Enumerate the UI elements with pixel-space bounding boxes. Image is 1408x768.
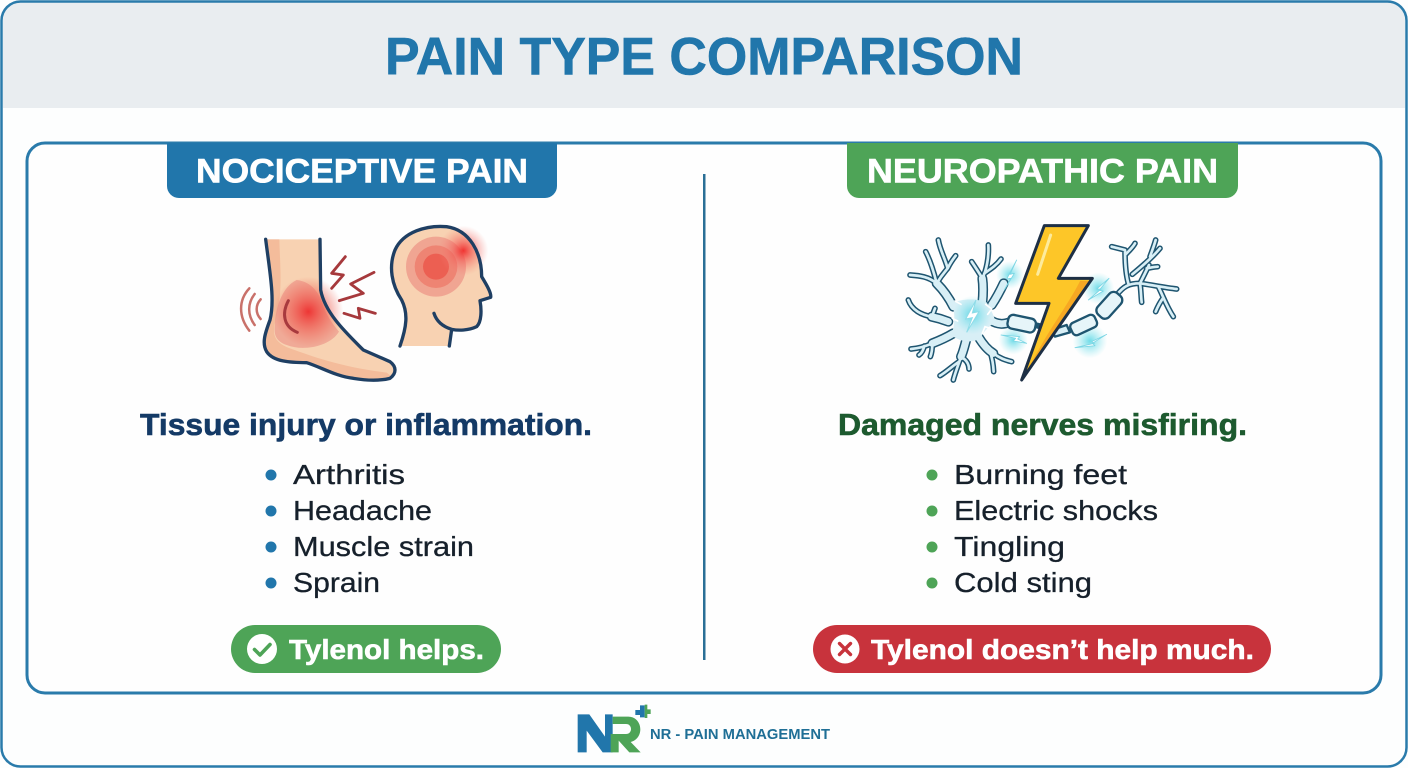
list: neuropathic examples: Tingling [954, 531, 1065, 562]
heading: neuropathic pain: NEUROPATHIC PAIN [867, 152, 1218, 190]
footer logo: NR pain management [578, 705, 830, 752]
axon segments [1035, 325, 1042, 327]
foot [264, 239, 395, 380]
heading: nociceptive pain [167, 143, 557, 198]
icon: neuron and lightning bolt [908, 226, 1177, 380]
list: neuropathic examples: Electric shocks [954, 495, 1158, 526]
callout: tylenol helps [231, 625, 501, 673]
neuron body [951, 299, 995, 341]
list: neuropathic examples: Burning feet [954, 459, 1127, 490]
list: nociceptive examples: Muscle strain [293, 531, 474, 562]
logo mark [578, 705, 651, 752]
heading: nociceptive pain: NOCICEPTIVE PAIN [196, 152, 528, 190]
heading: neuropathic pain [847, 143, 1238, 198]
header band [3, 2, 1405, 108]
lightning marks [332, 257, 375, 318]
glows [996, 261, 1024, 289]
right neuron [1112, 240, 1177, 317]
icon: injured foot and aching head [241, 226, 491, 380]
main comparison panel [27, 143, 1381, 693]
title: PAIN TYPE COMPARISON [385, 28, 1023, 86]
list: nociceptive examples: Headache [293, 495, 432, 526]
panel: nociceptive pain [140, 143, 592, 673]
list: neuropathic examples: Cold sting [954, 567, 1092, 598]
panel: neuropathic pain [813, 143, 1271, 673]
icon: check mark [247, 634, 277, 664]
list: nociceptive examples: Arthritis [293, 459, 405, 490]
callout: tylenol helps: Tylenol helps. [289, 634, 484, 665]
pain waves [241, 288, 261, 331]
callout: tylenol does not help much [813, 625, 1271, 673]
icon: cross mark [830, 634, 860, 664]
list: nociceptive examples [266, 459, 474, 598]
cause: tissue injury: Tissue injury or inflammation. [140, 407, 592, 442]
logo text: NR - PAIN MANAGEMENT [650, 726, 830, 743]
list: neuropathic examples [926, 459, 1158, 598]
cause: damaged nerves: Damaged nerves misfiring. [838, 407, 1247, 442]
centre divider [703, 174, 706, 660]
lightning bolt [1016, 226, 1092, 380]
left neuron [908, 240, 1012, 380]
list: nociceptive examples: Sprain [293, 567, 380, 598]
callout: tylenol does not help much: Tylenol doesn’t help much. [871, 634, 1254, 665]
head [392, 226, 491, 346]
small sparks [1001, 260, 1109, 348]
